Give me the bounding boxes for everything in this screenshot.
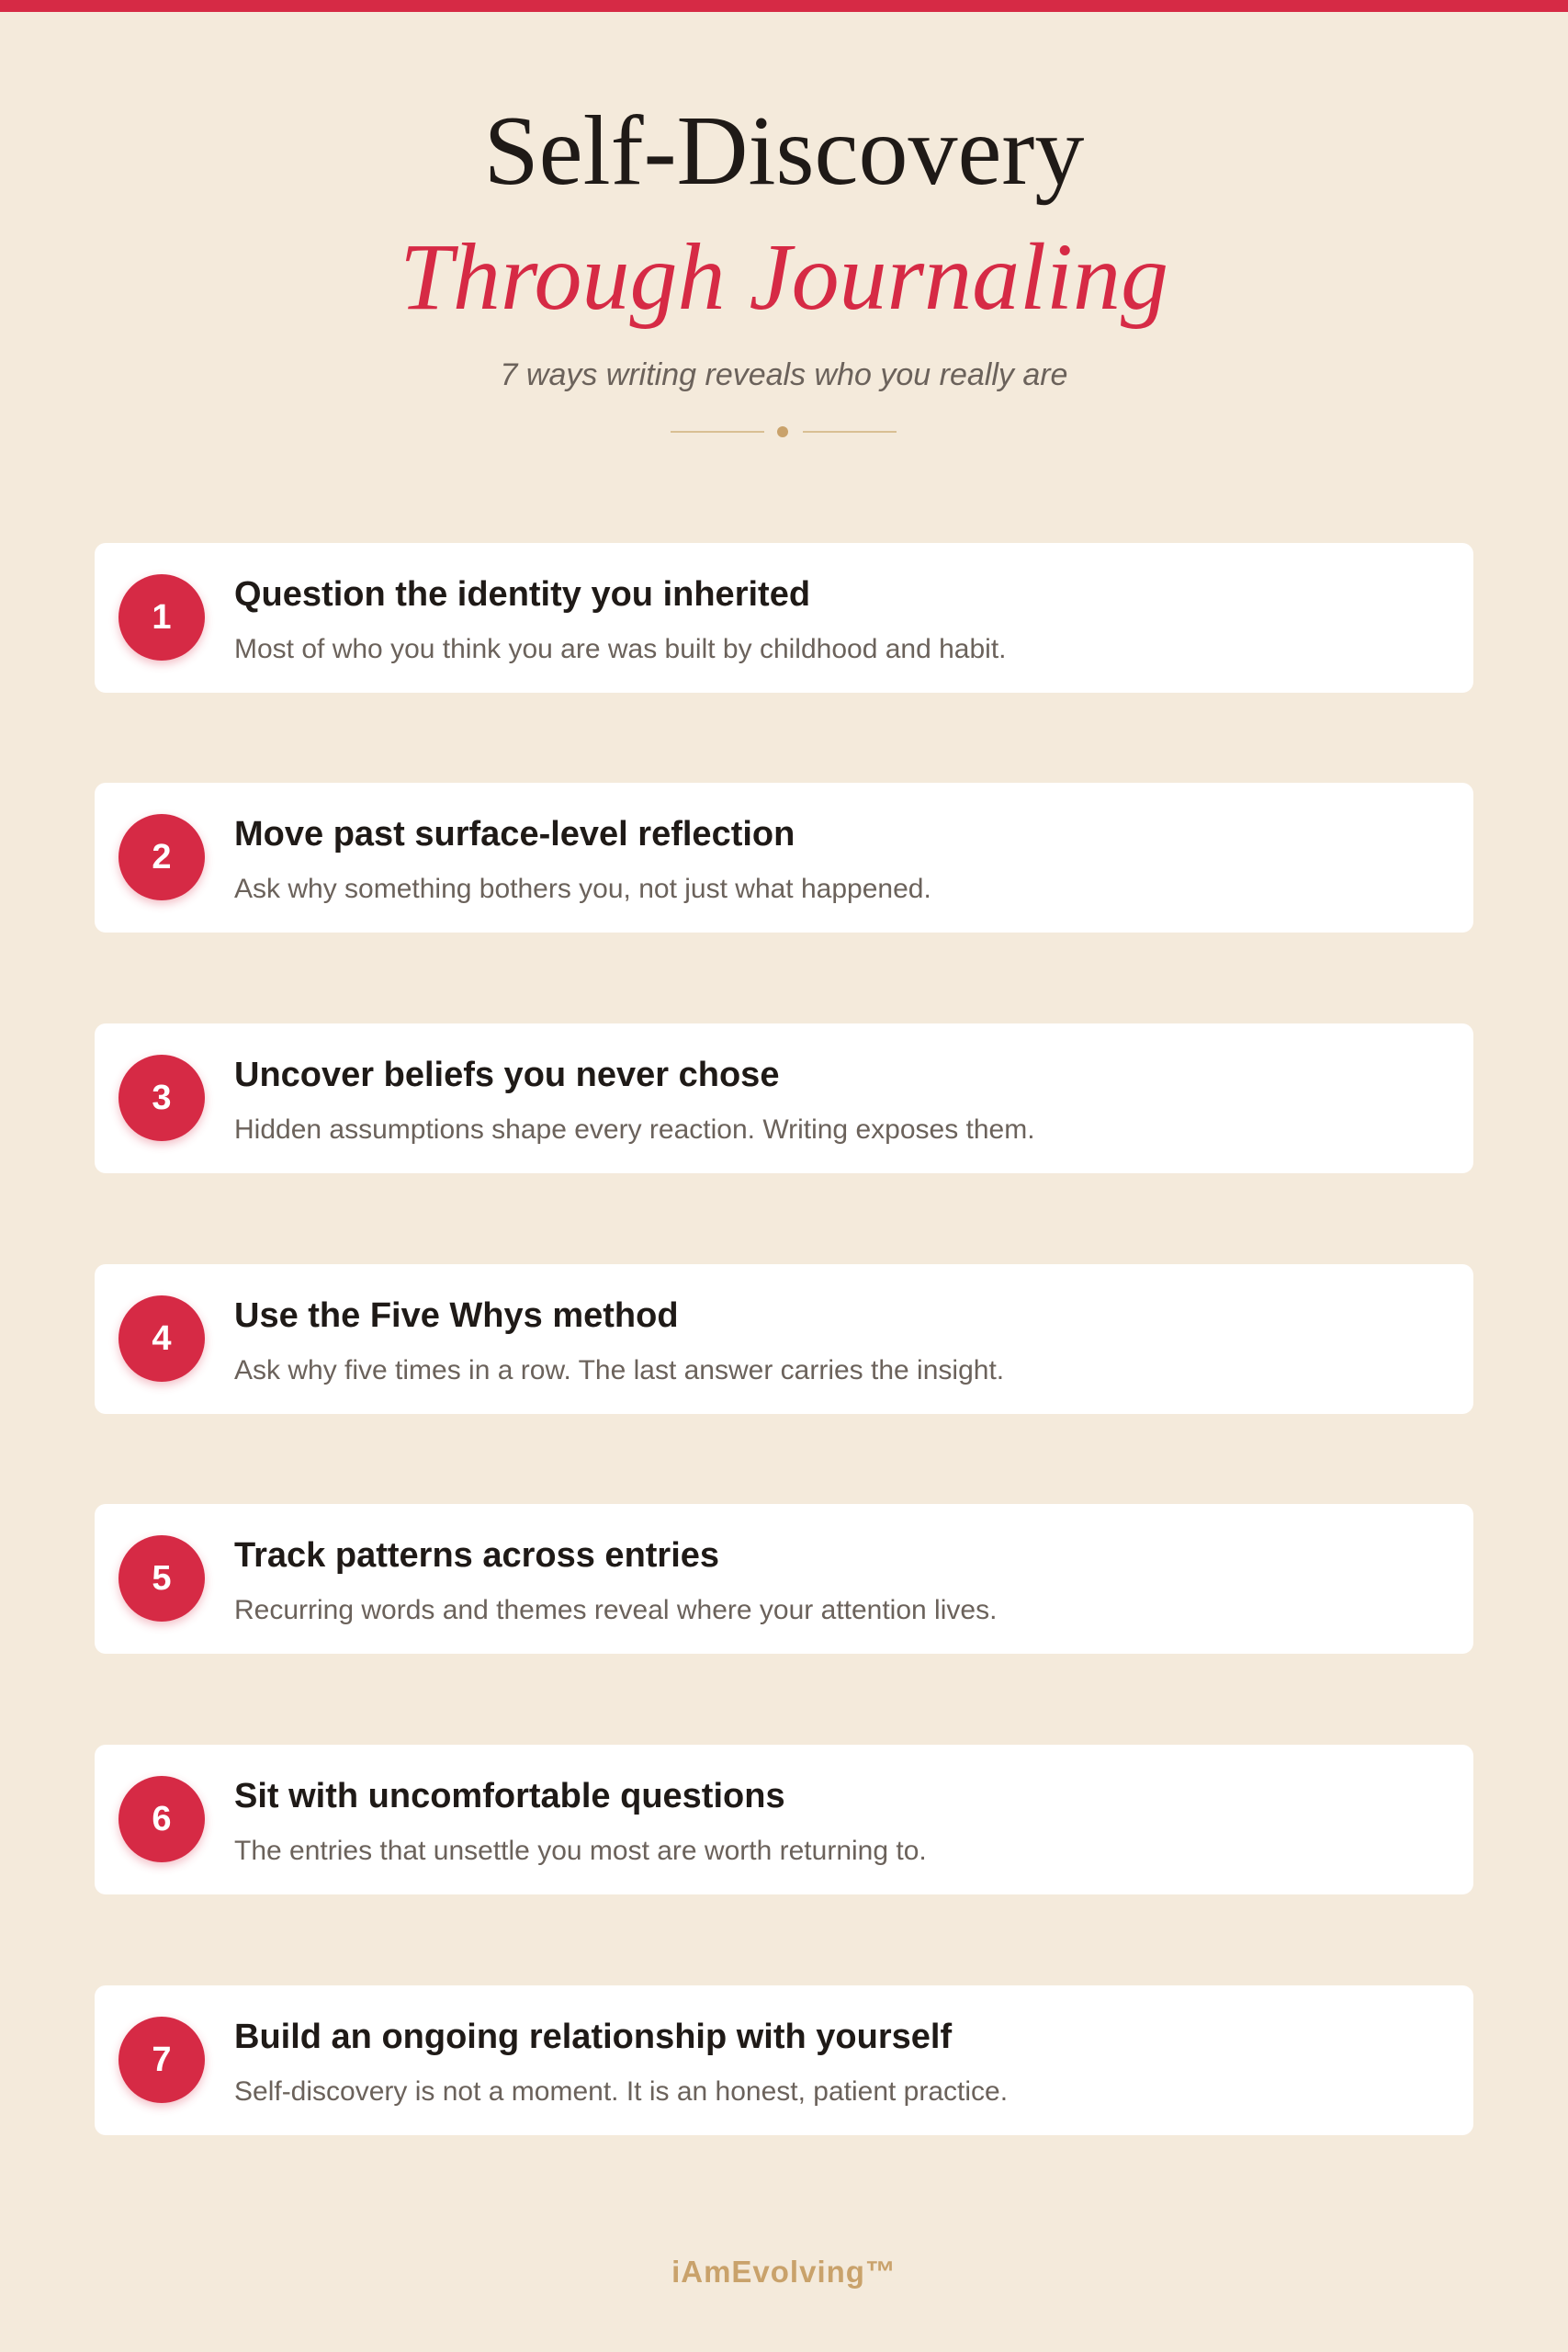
- card 1: 1: [152, 598, 172, 637]
- card 5: Recurring words and themes reveal where your attention lives.: [234, 1595, 997, 1625]
- card 3: Uncover beliefs you never chose: [234, 1056, 779, 1094]
- card 5: [95, 1504, 1473, 1654]
- card 3: Hidden assumptions shape every reaction. Writing exposes them.: [234, 1114, 1035, 1145]
- card 4: [95, 1264, 1473, 1414]
- card 3: 3: [152, 1079, 172, 1117]
- card 7: Build an ongoing relationship with yourself: [234, 2018, 952, 2056]
- title: Self-Discovery: [484, 96, 1084, 206]
- card 1: [95, 543, 1473, 693]
- card 4: Use the Five Whys method: [234, 1296, 679, 1335]
- subtitle: 7 ways writing reveals who you really are: [501, 357, 1067, 392]
- card 2: Move past surface-level reflection: [234, 815, 795, 854]
- card 7: Self-discovery is not a moment. It is an honest, patient practice.: [234, 2076, 1008, 2107]
- footer brand: iAmEvolving™: [671, 2255, 897, 2289]
- card 1: Most of who you think you are was built by childhood and habit.: [234, 634, 1007, 664]
- card 3: [95, 1023, 1473, 1173]
- card 1: Question the identity you inherited: [234, 575, 810, 614]
- card 6: The entries that unsettle you most are worth returning to.: [234, 1836, 927, 1866]
- card 2: 2: [152, 838, 172, 876]
- card 5: Track patterns across entries: [234, 1536, 719, 1575]
- card 6: Sit with uncomfortable questions: [234, 1777, 785, 1815]
- title accent: Through Journaling: [400, 224, 1168, 330]
- card 6: 6: [152, 1800, 172, 1838]
- card 6: [95, 1745, 1473, 1894]
- card 2: Ask why something bothers you, not just what happened.: [234, 874, 931, 904]
- card 7: 7: [152, 2041, 172, 2079]
- card 4: 4: [152, 1319, 172, 1358]
- card 7: [95, 1985, 1473, 2135]
- card 4: Ask why five times in a row. The last answer carries the insight.: [234, 1355, 1004, 1385]
- card 5: 5: [152, 1559, 172, 1598]
- card 2: [95, 783, 1473, 933]
